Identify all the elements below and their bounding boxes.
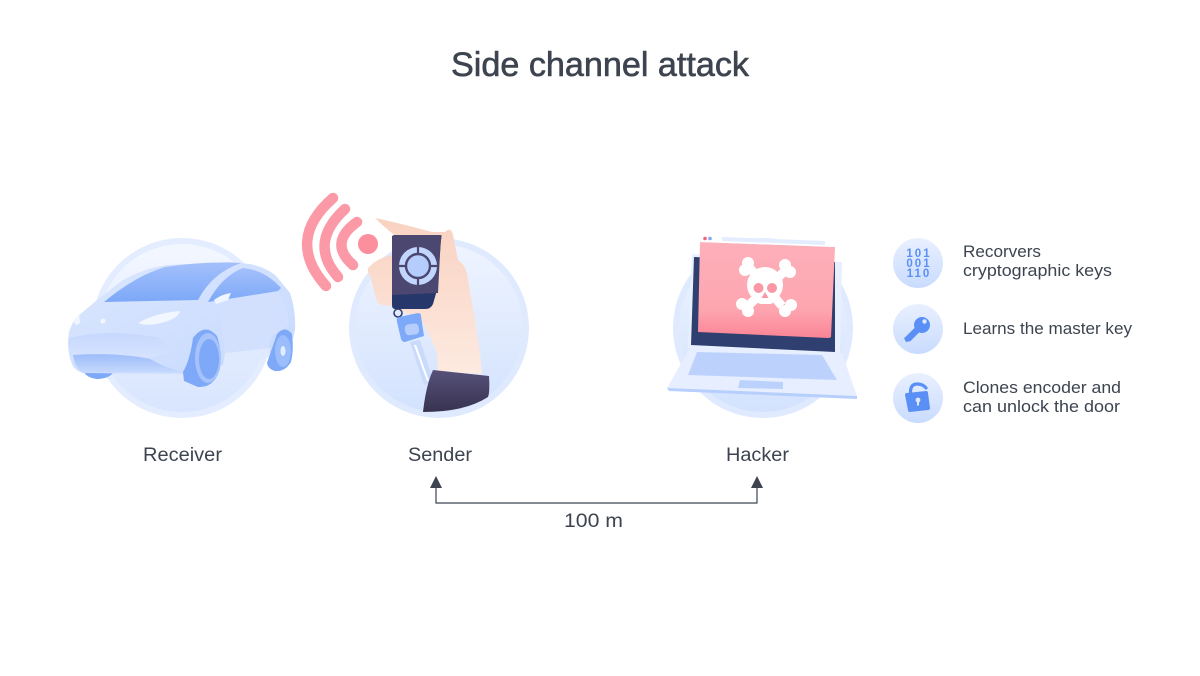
wing mirror — [214, 293, 231, 304]
icon: binary digits — [893, 238, 943, 288]
rocker panel — [223, 348, 270, 365]
wireless signal — [307, 198, 378, 286]
side window — [208, 268, 281, 302]
laptop screen — [691, 257, 835, 352]
front grille shading — [69, 333, 172, 358]
receiver backdrop circle — [92, 238, 272, 418]
item: recovers cryptographic keys — [893, 238, 1112, 288]
lower bumper — [73, 354, 183, 373]
item: clones encoder — [893, 373, 1121, 423]
key head — [394, 309, 424, 342]
arrow: 100 m distance bracket — [430, 476, 763, 503]
skull and crossbones — [736, 257, 797, 317]
sleeve — [423, 370, 489, 412]
windshield — [104, 262, 241, 302]
text: master key: Learns the master key — [963, 319, 1132, 338]
browser window — [698, 236, 835, 338]
sender backdrop circle — [349, 238, 529, 418]
headlight — [138, 311, 180, 325]
text: clones encoder: Clones encoder and — [963, 378, 1121, 397]
door shading — [218, 292, 288, 353]
label: hacker: Hacker — [726, 445, 790, 466]
label: distance: 100 m — [564, 511, 623, 532]
icon: open padlock — [893, 373, 943, 423]
front left tyre — [83, 371, 113, 379]
car body — [68, 262, 295, 374]
text: clones encoder: can unlock the door — [963, 397, 1120, 416]
front wheel — [183, 329, 221, 387]
illustration: receiver car — [68, 238, 295, 418]
icon: binary digits: 001 — [906, 258, 932, 270]
rear wheel — [267, 330, 293, 371]
laptop lid — [688, 254, 842, 355]
illustration: hacker laptop — [667, 236, 857, 418]
label: receiver: Receiver — [143, 445, 223, 466]
hacker backdrop circle — [673, 238, 853, 418]
text: recovers keys: cryptographic keys — [963, 261, 1112, 280]
hand — [368, 218, 482, 374]
small lights — [74, 314, 106, 325]
icon: binary digits: 110 — [907, 268, 931, 280]
key blade — [410, 340, 433, 385]
item: learns the master key — [893, 304, 1132, 354]
icon: binary digits: 101 — [906, 248, 932, 260]
icon: key — [893, 304, 943, 354]
key fob — [392, 235, 442, 309]
title: Side channel attack — [451, 46, 750, 84]
text: recovers keys: Recorvers — [963, 242, 1041, 261]
label: sender: Sender — [408, 445, 473, 466]
laptop base — [667, 348, 857, 399]
illustration: sender hand with key fob — [307, 198, 529, 418]
